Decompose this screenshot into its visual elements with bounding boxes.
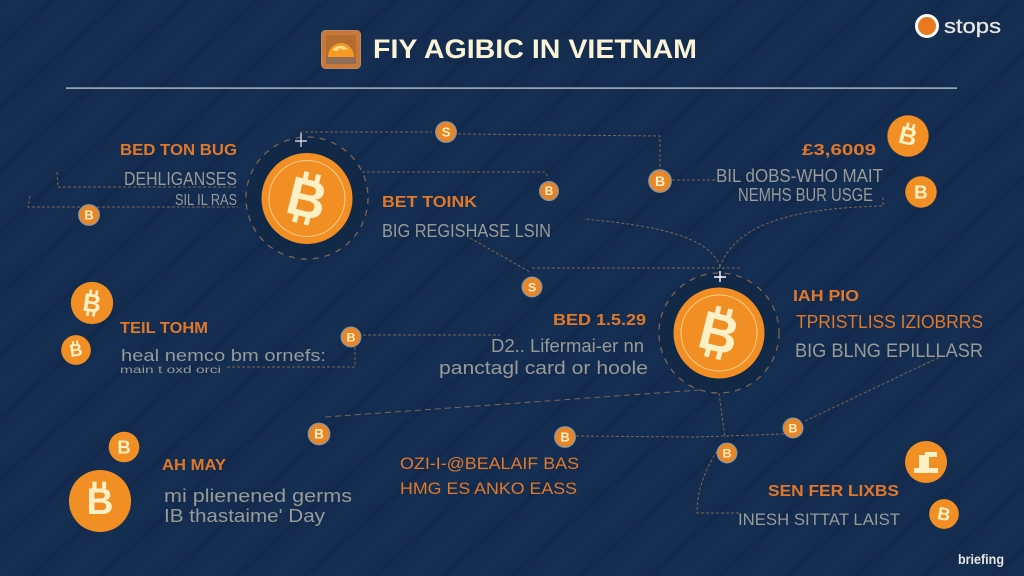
small node: S — [528, 280, 536, 294]
coin: B — [117, 436, 131, 457]
coin: B — [896, 122, 920, 152]
text block: left middle — [120, 320, 326, 376]
text block: bottom left: AH MAY — [162, 457, 226, 474]
footer brand: briefing — [958, 551, 1004, 567]
logo: stops — [944, 16, 1001, 38]
text block: centre middle: panctagl card or hoole — [439, 358, 648, 378]
small node — [783, 418, 803, 438]
dashed ring: lower — [659, 273, 779, 393]
big coin lower: B — [693, 300, 745, 367]
small node — [717, 443, 737, 463]
small node: B — [655, 173, 665, 189]
small node: B — [789, 421, 798, 435]
logo — [916, 16, 1001, 38]
coin — [61, 335, 91, 365]
coin large lower left: B — [87, 480, 113, 522]
small node — [436, 122, 456, 142]
text block: centre middle: BED 1.5.29 — [553, 312, 646, 329]
small node — [79, 205, 99, 225]
header icon — [322, 30, 360, 68]
text block: centre top — [382, 194, 551, 241]
text block: centre top: BET TOINK — [382, 194, 477, 211]
text block: bottom left: IB thastaime' Day — [164, 506, 325, 526]
small node — [341, 327, 361, 347]
text block: bottom centre — [400, 454, 579, 498]
text block: centre middle: D2.. Lifermai-er nn — [491, 336, 644, 356]
coin: B — [68, 339, 84, 361]
text block: left middle: TEIL TOHM — [120, 320, 208, 337]
text block: bottom right: INESH SITTAT LAIST — [738, 510, 900, 529]
coin — [887, 115, 929, 157]
text block: bottom left: mi plienened germs — [164, 486, 352, 506]
text block: top left: DEHLIGANSES — [124, 169, 237, 189]
text block: top left: SIL IL RAS — [175, 192, 237, 209]
sparkle: upper — [295, 133, 307, 147]
big coin upper: B — [281, 165, 333, 233]
text block: right middle: IAH PIO — [793, 288, 859, 305]
small node: B — [545, 184, 554, 198]
text block: right middle: TPRISTLISS IZIOBRRS — [796, 312, 983, 332]
header rule — [66, 88, 957, 89]
text block: right middle — [793, 288, 983, 362]
small node: B — [84, 207, 94, 222]
title: FIY AGIBIC IN VIETNAM — [373, 34, 697, 64]
big coin lower — [674, 288, 764, 378]
coin large lower left — [69, 470, 131, 532]
text block: top right — [716, 142, 883, 205]
small node: B — [560, 429, 570, 444]
text block: top right: NEMHS BUR USGE — [738, 185, 873, 205]
coin: B — [81, 289, 103, 319]
text block: centre middle — [439, 312, 648, 378]
text block: bottom left — [162, 457, 352, 526]
coin — [71, 282, 113, 324]
small node — [540, 182, 558, 200]
text block: bottom right: SEN FER LIXBS — [768, 483, 899, 500]
text block: top left — [120, 142, 237, 209]
small node — [555, 427, 575, 447]
text block: right middle: BIG BLNG EPILLLASR — [795, 341, 983, 362]
coin: stacked icon — [905, 441, 947, 483]
coin: B — [936, 503, 952, 525]
coin — [905, 176, 937, 208]
coin — [109, 432, 139, 462]
sparkle: lower — [714, 271, 726, 282]
dashed ring: upper — [246, 137, 368, 259]
small node: S — [442, 124, 451, 139]
coin: B — [914, 182, 928, 203]
text block: centre top: BIG REGISHASE LSIN — [382, 221, 551, 241]
text block: bottom centre: OZI-I-@BEALAIF BAS — [400, 454, 579, 473]
text block: top left: BED TON BUG — [120, 142, 237, 159]
text block: left middle: main t oxd orci — [120, 365, 221, 376]
text block: top right: £3,6009 — [802, 142, 876, 159]
small node — [308, 423, 330, 445]
big coin upper — [262, 153, 352, 244]
text block: bottom right — [738, 483, 900, 529]
small node — [649, 170, 671, 192]
text block: left middle: heal nemco bm ornefs: — [121, 346, 326, 365]
small node: B — [723, 446, 732, 460]
small node: B — [314, 427, 324, 442]
small node — [522, 277, 542, 297]
text block: top right: BIL dOBS-WHO MAIT — [716, 166, 883, 186]
coin — [929, 499, 959, 529]
small node: B — [347, 330, 356, 344]
connector lines — [28, 132, 942, 513]
text block: bottom centre: HMG ES ANKO EASS — [400, 479, 577, 498]
